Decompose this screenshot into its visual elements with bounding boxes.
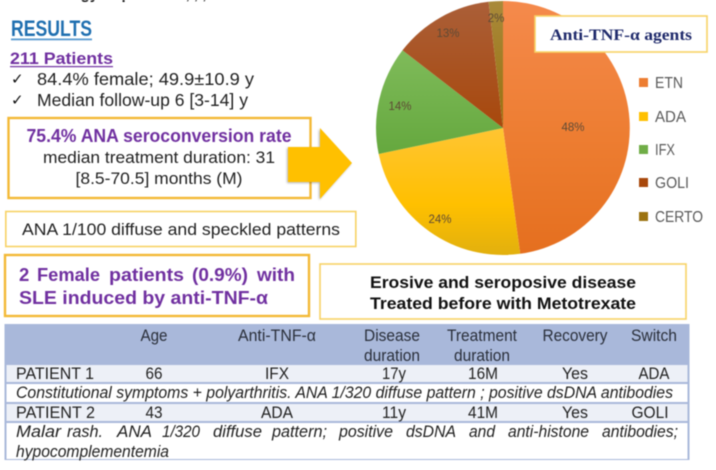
patient 1 row: Yes [562,365,588,383]
chart legend: ADA [655,109,686,126]
callout: seroconversion rate [8,118,310,198]
callout: SLE patients: with [256,264,295,285]
patient 2 description: Malar [16,423,63,441]
patient 2 description: dsDNA [406,423,456,441]
patient 2 row: ADA [261,404,293,422]
chart legend: GOLI [655,175,689,192]
slice: IFX 14% [376,50,503,154]
chart title: Anti-TNF-α agents [535,16,707,52]
patient summary: Median follow-up 6 [3-14] y [37,90,248,110]
patient 2 description: hypocomplementemia [16,443,169,461]
patient table [4,324,690,461]
patient 2 row: PATIENT 2 [16,404,95,422]
patient 2 description: diffuse [213,423,262,441]
callout: SLE patients: (0.9%) [192,264,248,285]
patient 2 row: 41M [468,404,498,422]
patient 1 row: IFX [265,365,289,383]
callout: ANA patterns [6,212,356,246]
table header row: Disease [364,327,420,345]
table header row: Treatment [447,327,517,345]
slice: ETN 48% [503,1,630,254]
patient 2 description: antibodies; [602,423,678,441]
arrow to pie chart [288,128,352,199]
slice percentage labels: 13% [436,28,460,40]
callout: erosive disease: Erosive and seroposive disease [370,273,636,292]
patient 1 row: 66 [146,365,162,383]
table background [4,324,690,460]
callout: SLE patients: patients [109,264,184,285]
patient 1 row: 16M [468,365,498,383]
chart title: Anti-TNF-α agents: Anti-TNF-α agents [550,27,692,44]
slice percentage labels: 48% [561,122,585,134]
callout: SLE patients: SLE induced by anti-TNF-α [19,287,269,308]
patient 2 row: 43 [146,404,162,422]
patient 2 description: and [469,423,496,441]
patient 1 description: Constitutional symptoms + polyarthritis. ANA 1/320 diffuse pattern ; positive dsDNA antibodies [16,384,673,402]
slice: ADA 24% [379,128,520,255]
callout: SLE patients: Female [37,264,100,285]
patient summary: ✓ [11,92,24,109]
chart legend: CERTO [655,209,703,226]
patient 2 description: anti-histone [508,423,589,441]
slice percentage labels: 24% [428,214,452,226]
patient 2 description: ANA [116,423,152,441]
chart legend: ETN [655,75,683,92]
patient summary: 211 Patients [10,49,113,68]
patient 2 description: positive [338,423,393,441]
slice: GOLI 13% [402,2,503,128]
patient 2 description [16,423,678,461]
slice percentage labels: 14% [388,101,412,113]
callout: seroconversion rate: median treatment duration: 31 [43,149,275,167]
table header row: Age [140,327,168,345]
patient 2 description: pattern; [271,423,327,441]
callout: seroconversion rate: [8.5-70.5] months (M) [76,170,242,188]
chart legend: IFX [655,142,675,159]
patient 2 row [16,404,668,422]
pie chart: anti-TNF agents [376,1,630,255]
table header row: Anti-TNF-α [238,327,316,345]
patient summary: ✓ [11,71,24,88]
table header row: Recovery [542,327,608,345]
callout: erosive disease: Treated before with Metotrexate [370,294,636,313]
callout: ANA patterns: ANA 1/100 diffuse and speckled patterns [22,220,340,239]
table header row: duration [364,347,420,365]
callout: seroconversion rate: 75.4% ANA seroconversion rate [26,126,292,146]
callout: SLE patients [5,255,309,316]
callout: SLE patients: 2 [19,264,29,285]
patient 2 description: 1/320 [162,423,201,441]
slice percentage labels [388,13,585,226]
table header row: Switch [631,327,677,345]
patient 1 row: ADA [638,365,670,383]
patient 2 description: rash. [67,423,103,441]
patient summary [10,49,254,110]
patient 2 row: 11y [382,404,407,422]
patient 2 row: GOLI [632,404,668,422]
table header row [140,327,677,365]
chart legend [639,75,703,226]
patient 1 row: 17y [382,365,407,383]
heading: results: RESULTS [11,16,92,41]
patient 1 row [16,365,670,383]
patient 2 row: Yes [562,404,588,422]
callout: erosive disease [320,264,686,319]
slice: CERTO 2% [489,1,503,128]
patient summary: 84.4% female; 49.9±10.9 y [37,69,254,89]
patient 1 row: PATIENT 1 [16,365,94,383]
slice percentage labels: 2% [488,13,504,25]
table header row: duration [454,347,510,365]
